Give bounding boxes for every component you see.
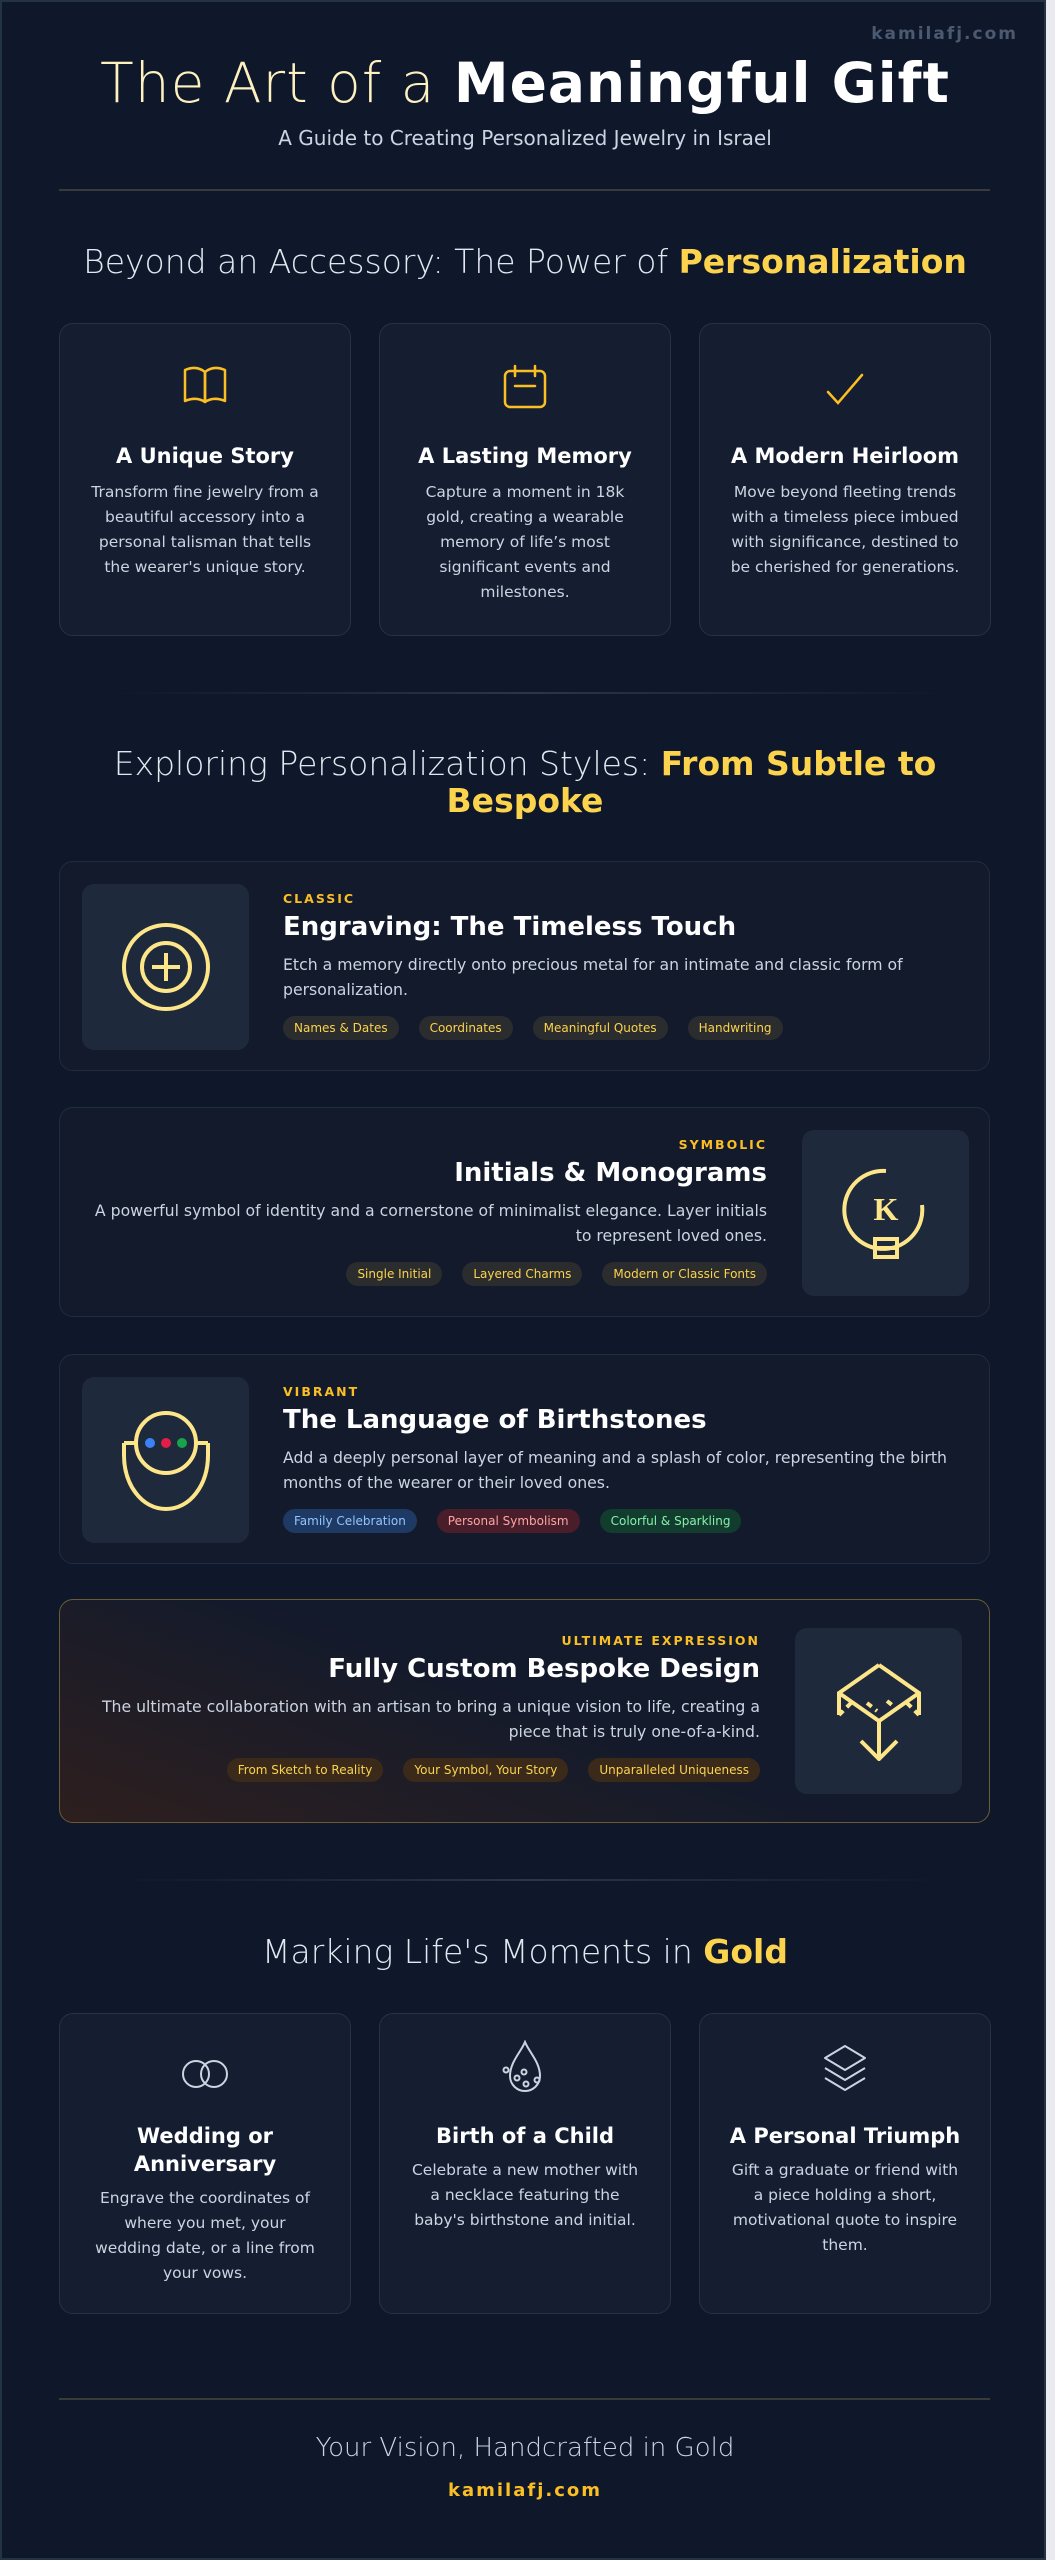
text: initials: SYMBOLIC: [679, 1137, 767, 1152]
text: birthstones: Colorful & Sparkling: [611, 1514, 730, 1528]
card: birth: Celebrate a new mother with a necklace featuring the baby's birthstone and initial.: [412, 2161, 638, 2229]
card: wedding: Engrave the coordinates of where you met, your wedding date, or a line from your vows.: [95, 2189, 315, 2282]
text: engraving: Coordinates: [430, 1021, 502, 1035]
icon: monogram: [802, 1130, 969, 1296]
text: initials: Single Initial: [357, 1267, 431, 1281]
card: unique story: Transform fine jewelry from a beautiful accessory into a personal talisman that tells the wearer's unique story.: [91, 483, 319, 576]
text: bespoke: [102, 1633, 760, 1782]
row: initials: [59, 1107, 990, 1317]
watermark: kamilafj.com: [871, 24, 1018, 44]
text: birthstones: Personal Symbolism: [448, 1514, 569, 1528]
text: birthstones: The Language of Birthstones: [283, 1405, 707, 1435]
text: engraving: Meaningful Quotes: [544, 1021, 657, 1035]
text: initials: Layered Charms: [473, 1267, 571, 1281]
icon: birthstone: [82, 1377, 249, 1543]
icon: engraving: [82, 884, 249, 1050]
text: engraving: Engraving: The Timeless Touch: [283, 912, 736, 942]
card: unique story: [59, 323, 351, 636]
text: initials: Modern or Classic Fonts: [613, 1267, 756, 1281]
card: modern heirloom: Move beyond fleeting trends with a timeless piece imbued with significance, destined to be cherished for generations.: [731, 483, 959, 576]
card: triumph: A Personal Triumph: [730, 2124, 960, 2148]
icon: layers: [824, 2045, 866, 2091]
text: birthstones: VIBRANT: [283, 1384, 359, 1399]
title: The Art of a Meaningful Gift: [100, 51, 950, 115]
footer url: kamilafj.com: [448, 2480, 602, 2501]
row: engraving: [59, 861, 990, 1071]
heading: life's moments: Marking Life's Moments in Gold: [262, 1932, 788, 1971]
text: bespoke: From Sketch to Reality: [238, 1763, 372, 1777]
row: birthstones: [59, 1354, 990, 1564]
heading: power of personalization: Beyond an Accessory: The Power of Personalization: [83, 242, 967, 281]
text: engraving: [283, 891, 903, 1040]
icon: cube: [795, 1628, 962, 1794]
card: birth: [379, 2013, 671, 2314]
icon: book: [184, 366, 226, 404]
footer tagline: Your Vision, Handcrafted in Gold: [316, 2433, 734, 2463]
heading: styles: Exploring Personalization Styles: From Subtle to Bespoke: [114, 744, 936, 820]
row: bespoke: [59, 1599, 990, 1823]
text: bespoke: ULTIMATE EXPRESSION: [562, 1633, 760, 1648]
icon: rings: [182, 2060, 228, 2088]
text: engraving: Handwriting: [699, 1021, 772, 1035]
icon: check: [826, 374, 864, 405]
card: wedding: [59, 2013, 351, 2314]
icon: calendar: [504, 364, 546, 408]
card: unique story: A Unique Story: [116, 444, 294, 468]
text: engraving: Etch a memory directly onto precious metal for an intimate and classic form of personalization.: [283, 955, 903, 999]
text: bespoke: The ultimate collaboration with an artisan to bring a unique vision to life, creating a piece that is truly one-of-a-kind.: [102, 1697, 760, 1741]
subtitle: A Guide to Creating Personalized Jewelry in Israel: [278, 126, 772, 150]
icon: monogram: K: [873, 1191, 898, 1227]
card: birth: Birth of a Child: [436, 2124, 614, 2148]
text: engraving: Names & Dates: [294, 1021, 388, 1035]
card: lasting memory: A Lasting Memory: [418, 444, 632, 468]
card: lasting memory: [379, 323, 671, 636]
text: initials: Initials & Monograms: [454, 1158, 767, 1188]
card: wedding: Wedding or Anniversary: [134, 2124, 276, 2176]
text: bespoke: Your Symbol, Your Story: [414, 1763, 557, 1777]
card: modern heirloom: A Modern Heirloom: [731, 444, 959, 468]
icon: drop: [502, 2040, 541, 2092]
text: birthstones: Family Celebration: [294, 1514, 406, 1528]
card: triumph: Gift a graduate or friend with a piece holding a short, motivational quote to inspire them.: [732, 2161, 958, 2254]
text: birthstones: [283, 1384, 947, 1533]
text: birthstones: Add a deeply personal layer of meaning and a splash of color, representing the birth months of the wearer or their loved ones.: [283, 1448, 947, 1492]
text: initials: [95, 1137, 767, 1286]
text: initials: A powerful symbol of identity and a cornerstone of minimalist elegance. Layer initials to represent loved ones.: [95, 1201, 767, 1245]
text: bespoke: Fully Custom Bespoke Design: [328, 1654, 760, 1684]
card: lasting memory: Capture a moment in 18k gold, creating a wearable memory of life’s most significant events and milestones.: [426, 483, 624, 601]
card: modern heirloom: [699, 323, 991, 636]
text: bespoke: Unparalleled Uniqueness: [599, 1763, 749, 1777]
text: engraving: CLASSIC: [283, 891, 355, 906]
card: triumph: [699, 2013, 991, 2314]
